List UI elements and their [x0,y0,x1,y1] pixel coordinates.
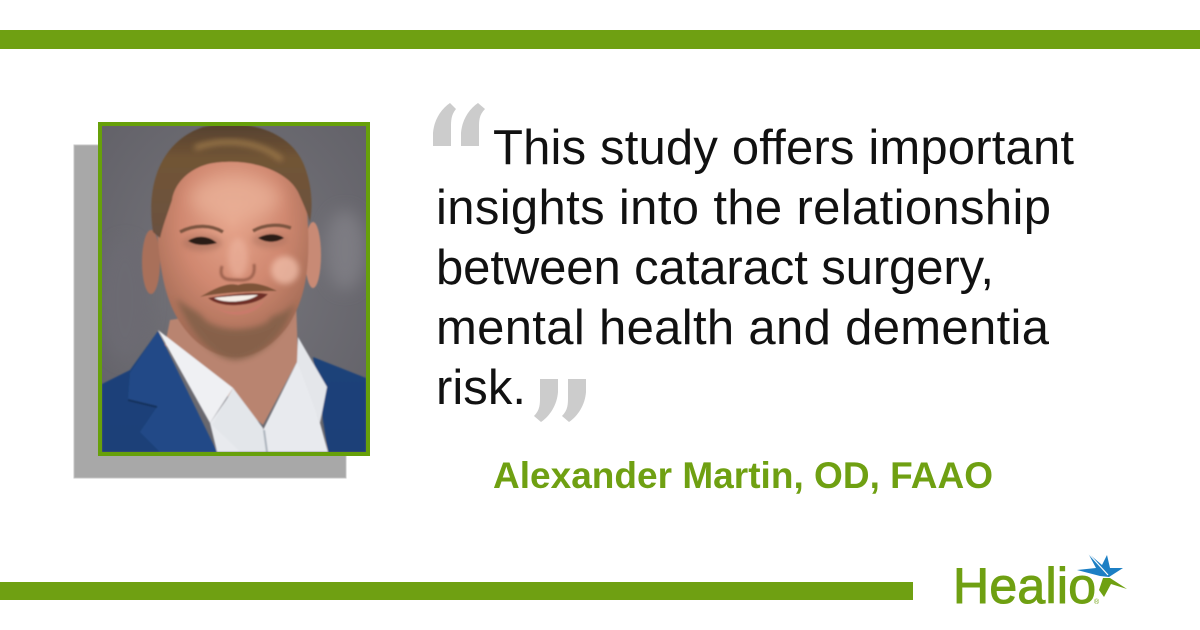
quote text: insights into the relationship [436,181,1051,235]
forehead highlight [190,176,280,220]
beard [176,298,295,360]
moustache [200,283,277,297]
collar right [297,337,327,423]
collar left [158,330,233,423]
attribution name: Alexander Martin, OD, FAAO [493,455,993,496]
quote text: mental health and dementia [436,301,1050,355]
eyebrows [180,226,223,232]
eyes [188,237,217,245]
closing quotation mark [534,379,586,422]
cheek shine [271,256,299,284]
Healio logo: ® [1094,598,1100,606]
lapel [128,331,217,452]
quote text: This study offers important [493,121,1074,175]
nose shadow [221,264,254,280]
jacket right [313,357,366,452]
face [157,150,308,357]
opening quotation mark [433,103,485,146]
top green bar [0,30,1200,49]
quote text: risk. [436,361,526,415]
eye sockets [182,235,222,251]
ears [142,230,160,294]
portrait photo of Alexander Martin [100,124,368,454]
mouth [208,293,268,305]
jacket left [102,334,160,452]
bottom green bar [0,582,913,600]
quote text [436,121,1074,415]
neck [165,300,298,425]
quote text: between cataract surgery, [436,241,994,295]
shirt placket [264,430,267,452]
gray photo shadow panel [74,145,346,478]
shirt body [210,360,328,452]
Healio logo: Healio [953,558,1096,614]
hair [151,124,312,238]
